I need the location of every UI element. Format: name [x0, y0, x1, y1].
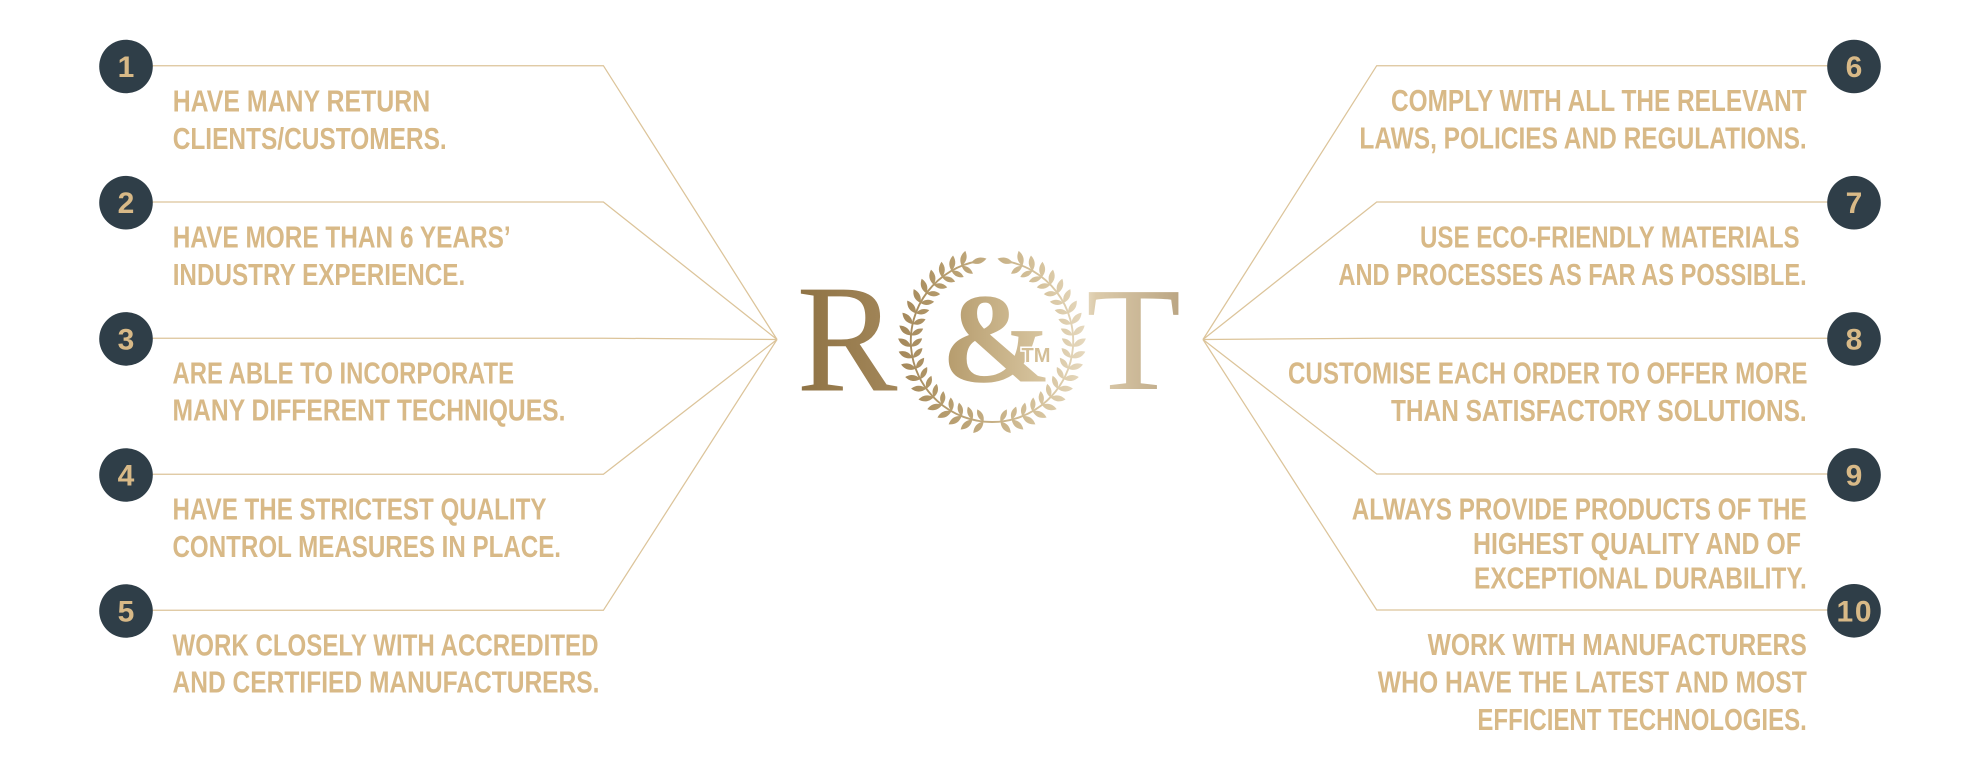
connector 2	[150, 202, 777, 340]
text 6: LAWS, POLICIES AND REGULATIONS.	[1359, 122, 1807, 156]
text 9	[1352, 492, 1807, 595]
item 3	[99, 312, 777, 428]
text 10: WORK WITH MANUFACTURERS	[1428, 628, 1807, 662]
text 10: EFFICIENT TECHNOLOGIES.	[1477, 703, 1807, 737]
badge 9	[1827, 448, 1881, 502]
text 2: HAVE MORE THAN 6 YEARS’	[173, 220, 511, 254]
text 8: THAN SATISFACTORY SOLUTIONS.	[1391, 394, 1807, 428]
text 1	[173, 85, 447, 156]
badge 6	[1827, 40, 1881, 93]
item 10	[1203, 340, 1881, 737]
text 3	[172, 356, 566, 428]
text 4	[172, 492, 561, 564]
logo letter T: T	[1086, 258, 1181, 422]
badge 5	[99, 584, 153, 638]
item 5	[99, 340, 777, 700]
item 9	[1203, 340, 1881, 595]
text 4: HAVE THE STRICTEST QUALITY	[172, 492, 546, 526]
text 5	[172, 628, 600, 700]
badge 4	[99, 448, 153, 502]
connector 5	[150, 340, 777, 610]
text 2: INDUSTRY EXPERIENCE.	[173, 258, 465, 292]
badge 6: 6	[1846, 51, 1862, 84]
text 10	[1378, 628, 1807, 737]
badge 2: 2	[118, 187, 134, 220]
connector 10	[1203, 340, 1830, 610]
item 7	[1203, 176, 1881, 340]
item 1	[99, 40, 777, 339]
connector 4	[150, 340, 777, 474]
item 8	[1203, 312, 1881, 428]
connector 6	[1203, 66, 1830, 339]
badge 3: 3	[118, 324, 134, 356]
text 7: USE ECO-FRIENDLY MATERIALS	[1420, 220, 1800, 254]
trademark mark: TM	[1022, 345, 1050, 367]
text 5: WORK CLOSELY WITH ACCREDITED	[172, 628, 598, 662]
badge 10: 10	[1836, 596, 1872, 628]
text 7: AND PROCESSES AS FAR AS POSSIBLE.	[1338, 258, 1807, 292]
logo: R&T with laurel wreath	[800, 251, 1178, 433]
badge 8: 8	[1846, 324, 1862, 356]
text 9: EXCEPTIONAL DURABILITY.	[1474, 561, 1807, 595]
connector 9	[1203, 340, 1830, 474]
badge 4: 4	[118, 460, 135, 492]
badge 8	[1827, 312, 1881, 366]
badge 7: 7	[1846, 187, 1862, 220]
connector 3	[150, 338, 777, 340]
item 2	[99, 176, 777, 340]
badge 2	[99, 176, 153, 230]
text 8: CUSTOMISE EACH ORDER TO OFFER MORE	[1288, 356, 1808, 390]
connector 1	[150, 66, 777, 339]
text 3: MANY DIFFERENT TECHNIQUES.	[172, 394, 566, 428]
text 5: AND CERTIFIED MANUFACTURERS.	[172, 666, 600, 700]
text 3: ARE ABLE TO INCORPORATE	[172, 356, 514, 390]
text 7	[1338, 220, 1807, 292]
item 4	[99, 340, 777, 564]
text 9: ALWAYS PROVIDE PRODUCTS OF THE	[1352, 492, 1807, 526]
text 6	[1359, 84, 1807, 156]
badge 5: 5	[118, 596, 134, 628]
text 1: CLIENTS/CUSTOMERS.	[173, 122, 447, 156]
text 6: COMPLY WITH ALL THE RELEVANT	[1391, 84, 1807, 118]
badge 9: 9	[1846, 460, 1862, 492]
badge 10	[1827, 584, 1881, 638]
connector 7	[1203, 202, 1830, 340]
text 8	[1288, 356, 1808, 428]
item 6	[1203, 40, 1881, 339]
logo ampersand: &	[941, 268, 1052, 410]
badge 7	[1827, 176, 1881, 230]
connector 8	[1203, 338, 1830, 340]
text 9: HIGHEST QUALITY AND OF	[1473, 527, 1801, 561]
badge 1	[99, 40, 153, 93]
text 4: CONTROL MEASURES IN PLACE.	[172, 530, 561, 564]
badge 3	[99, 312, 153, 366]
badge 1: 1	[118, 51, 134, 84]
text 1: HAVE MANY RETURN	[173, 85, 430, 119]
laurel wreath	[898, 251, 1086, 433]
text 10: WHO HAVE THE LATEST AND MOST	[1378, 666, 1807, 700]
logo letter R: R	[796, 254, 898, 424]
text 2	[173, 220, 511, 292]
